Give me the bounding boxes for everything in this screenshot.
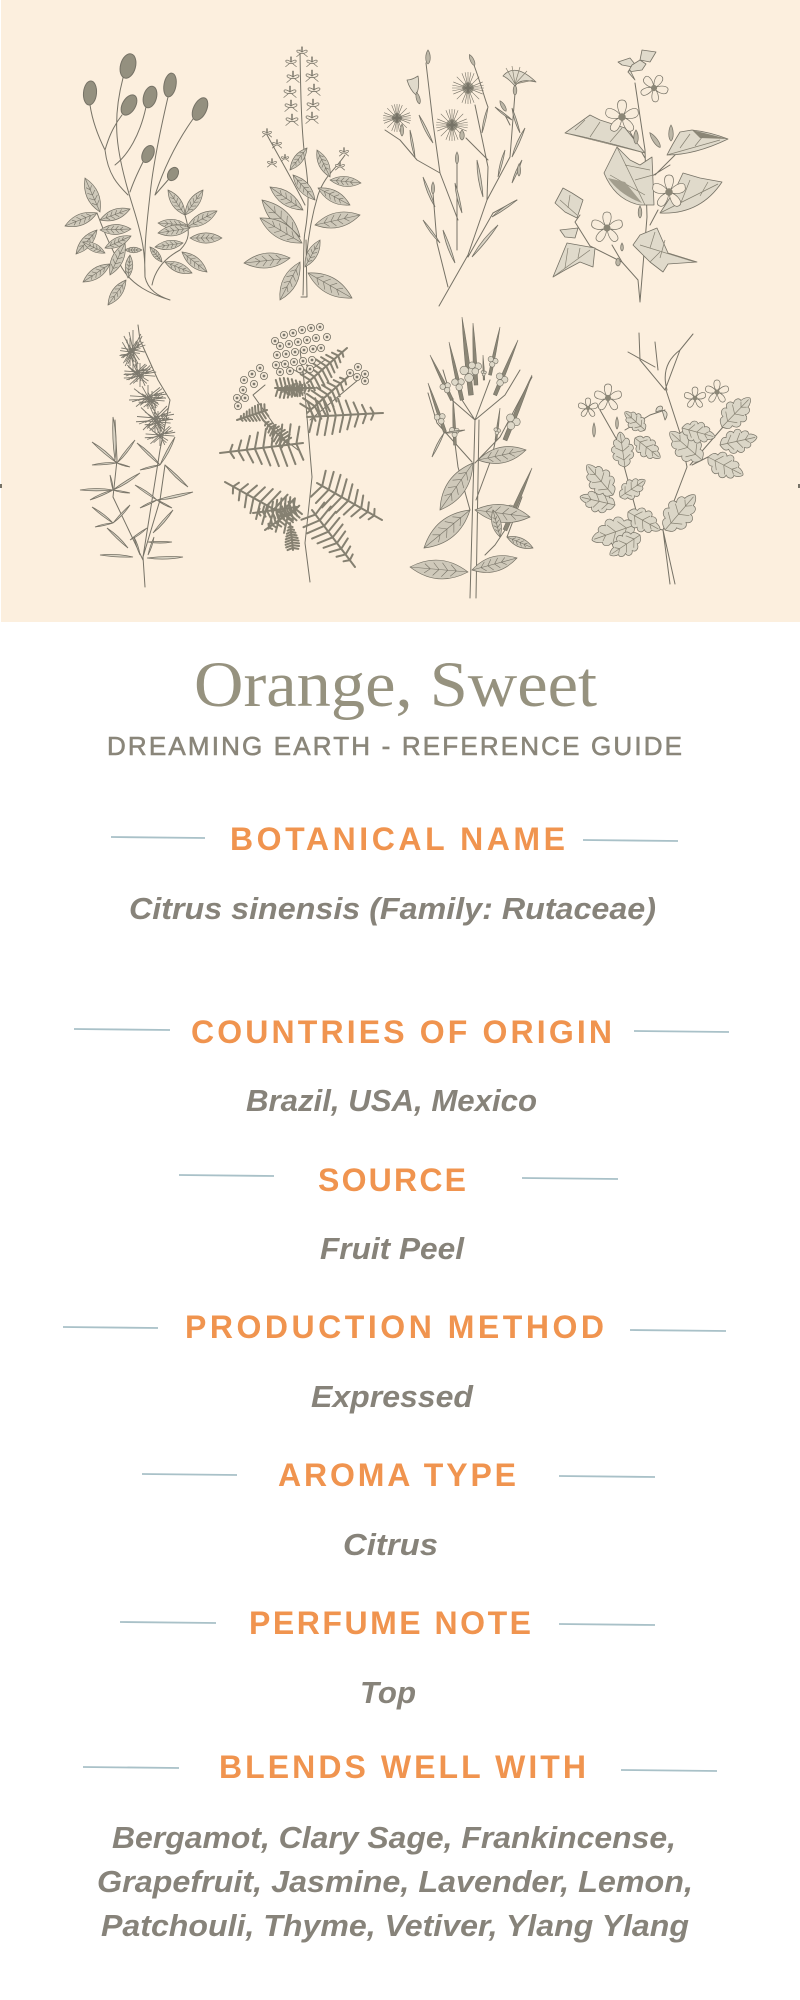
section: production method: PRODUCTION METHOD xyxy=(185,1309,604,1345)
subtitle: DREAMING EARTH - REFERENCE GUIDE xyxy=(107,731,682,761)
section: countries of origin: COUNTRIES OF ORIGIN xyxy=(191,1014,612,1050)
title: Orange, Sweet xyxy=(194,649,597,721)
section: aroma type xyxy=(142,1457,655,1562)
section: botanical name: Citrus sinensis (Family: Rutaceae) xyxy=(129,891,656,926)
section: botanical name: BOTANICAL NAME xyxy=(230,821,565,857)
section: production method xyxy=(63,1309,726,1414)
illustration: mallow plant with broad leaves xyxy=(553,50,728,302)
section: blends well with: BLENDS WELL WITH xyxy=(219,1749,586,1785)
section: perfume note: Top xyxy=(360,1675,416,1710)
illustration: hyssop plant with narrow leaves xyxy=(80,325,193,587)
section: source xyxy=(179,1162,618,1266)
illustration: cornflower plant xyxy=(383,50,536,306)
illustration: burnet plant with oval flower heads xyxy=(63,52,222,308)
section: production method: Expressed xyxy=(311,1379,474,1414)
section: blends well with xyxy=(83,1749,717,1943)
illustration: celandine plant with lobed leaves xyxy=(578,333,759,584)
section: countries of origin xyxy=(74,1014,729,1118)
illustration: vervain plant with pointed flower spikes xyxy=(409,316,539,598)
section: blends well with: Patchouli, Thyme, Vetiver, Ylang Ylang xyxy=(101,1908,689,1943)
illustration: sage plant with flower spike xyxy=(243,47,362,305)
illustration: tansy plant with feathered leaves xyxy=(216,323,391,582)
section: source: Fruit Peel xyxy=(320,1231,465,1266)
section: aroma type: Citrus xyxy=(343,1527,438,1562)
section: perfume note xyxy=(120,1605,655,1710)
section: botanical name xyxy=(111,821,678,926)
section: blends well with: Bergamot, Clary Sage, Frankincense, xyxy=(112,1820,676,1855)
edge marks xyxy=(0,484,800,488)
section: perfume note: PERFUME NOTE xyxy=(249,1605,531,1641)
section: blends well with: Grapefruit, Jasmine, Lavender, Lemon, xyxy=(97,1864,693,1899)
section: countries of origin: Brazil, USA, Mexico xyxy=(246,1083,537,1118)
section: source: SOURCE xyxy=(318,1162,466,1198)
section: aroma type: AROMA TYPE xyxy=(278,1457,516,1493)
panel: botanical illustrations xyxy=(0,0,800,622)
